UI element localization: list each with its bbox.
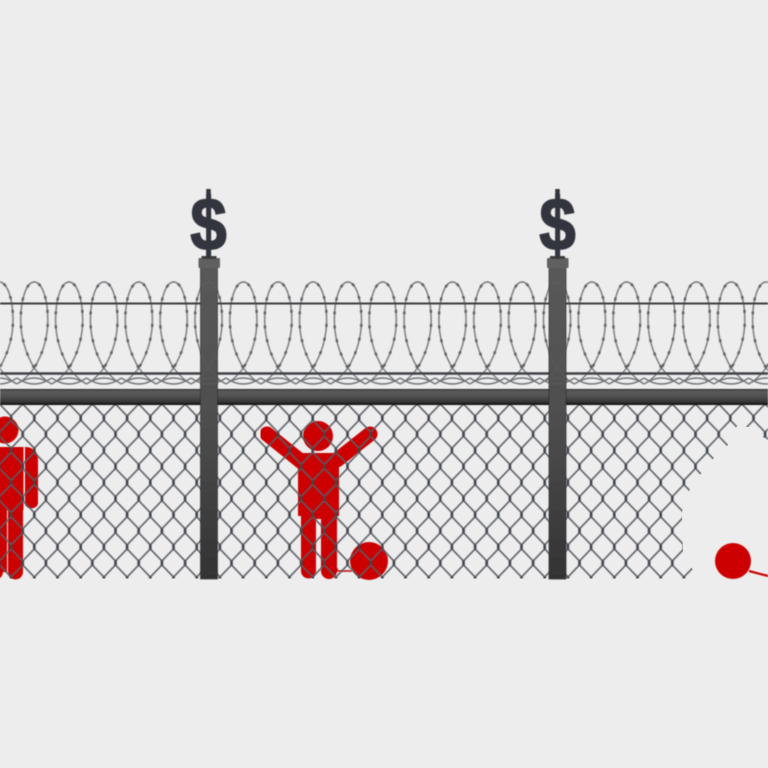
- chain-link mesh with a torn hole: [0, 402, 768, 580]
- centre figure with raised arms: [267, 421, 388, 580]
- razor wire coils: [0, 275, 768, 395]
- right dollar sign: $: [539, 183, 576, 266]
- left post: [198, 256, 220, 579]
- scene: prison fence with dollar-topped posts: [0, 188, 768, 581]
- right post: [547, 256, 568, 579]
- right ball and broken chain: [715, 543, 768, 579]
- left figure: [0, 416, 38, 580]
- left dollar sign: $: [190, 183, 227, 266]
- top rail: [0, 389, 768, 405]
